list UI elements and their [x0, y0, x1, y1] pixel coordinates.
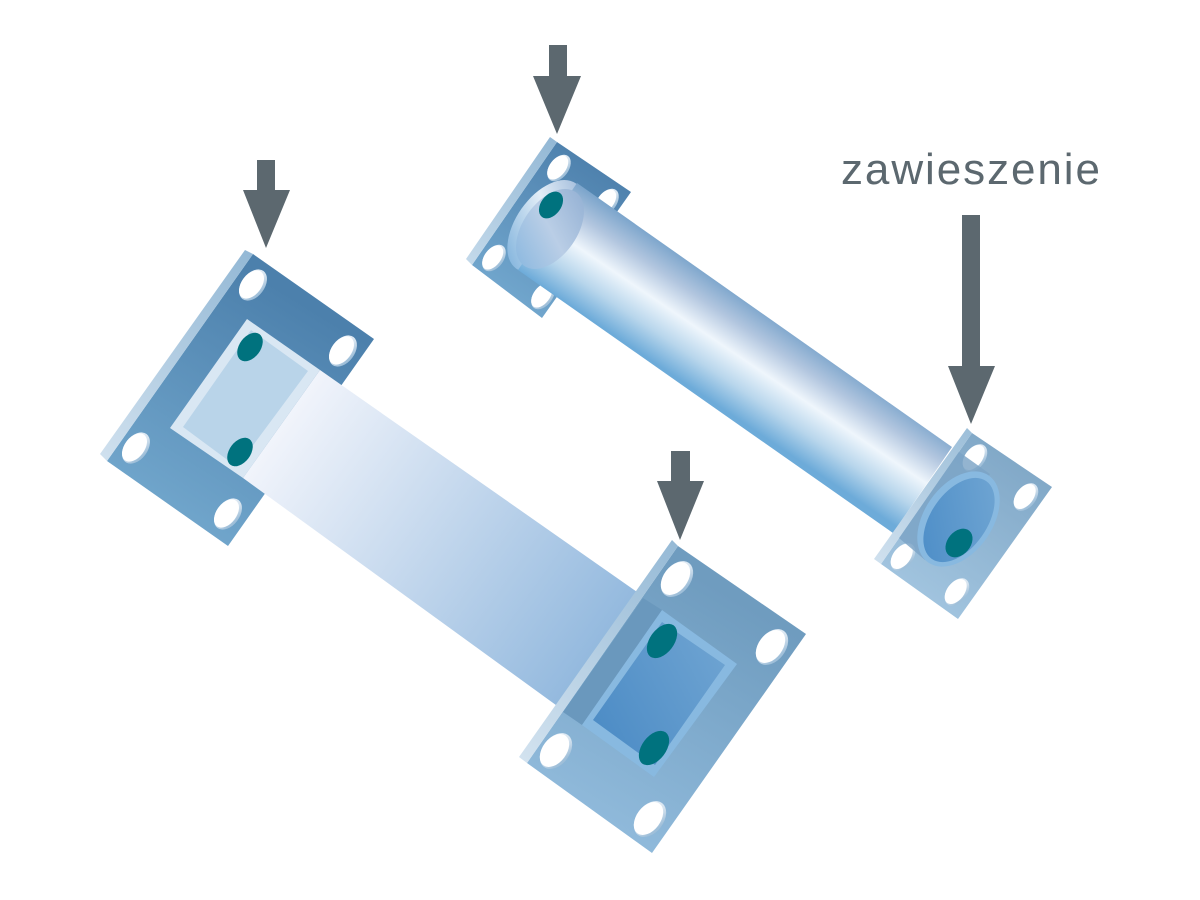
arrow: upper flange load — [533, 45, 581, 134]
lower flange plate — [874, 428, 1052, 619]
arrow: suspension — [948, 215, 995, 424]
teal pins — [633, 618, 683, 771]
round pipe assembly — [466, 137, 1052, 619]
arrow: left flange load — [243, 160, 290, 248]
rectangular opening — [582, 610, 737, 777]
teal pin — [940, 523, 978, 563]
cylindrical tube — [518, 183, 952, 533]
arrow: right flange load — [657, 451, 704, 540]
flange bolt holes — [886, 440, 1043, 610]
rectangular opening — [170, 319, 320, 478]
rectangular tube — [243, 370, 640, 708]
tube end ring — [492, 166, 600, 286]
label: zawieszenie: zawieszenie — [841, 145, 1100, 194]
flange bolt holes — [533, 555, 795, 843]
flange bolt holes — [116, 264, 363, 535]
round opening — [900, 456, 1017, 582]
teal pins — [222, 328, 268, 471]
tube end inner face — [502, 177, 598, 281]
upper flange plate — [466, 137, 631, 318]
square pipe assembly — [100, 250, 806, 853]
right flange plate — [519, 540, 806, 853]
flange bolt holes — [477, 150, 624, 314]
left flange plate — [100, 250, 374, 546]
teal pin — [534, 187, 568, 223]
